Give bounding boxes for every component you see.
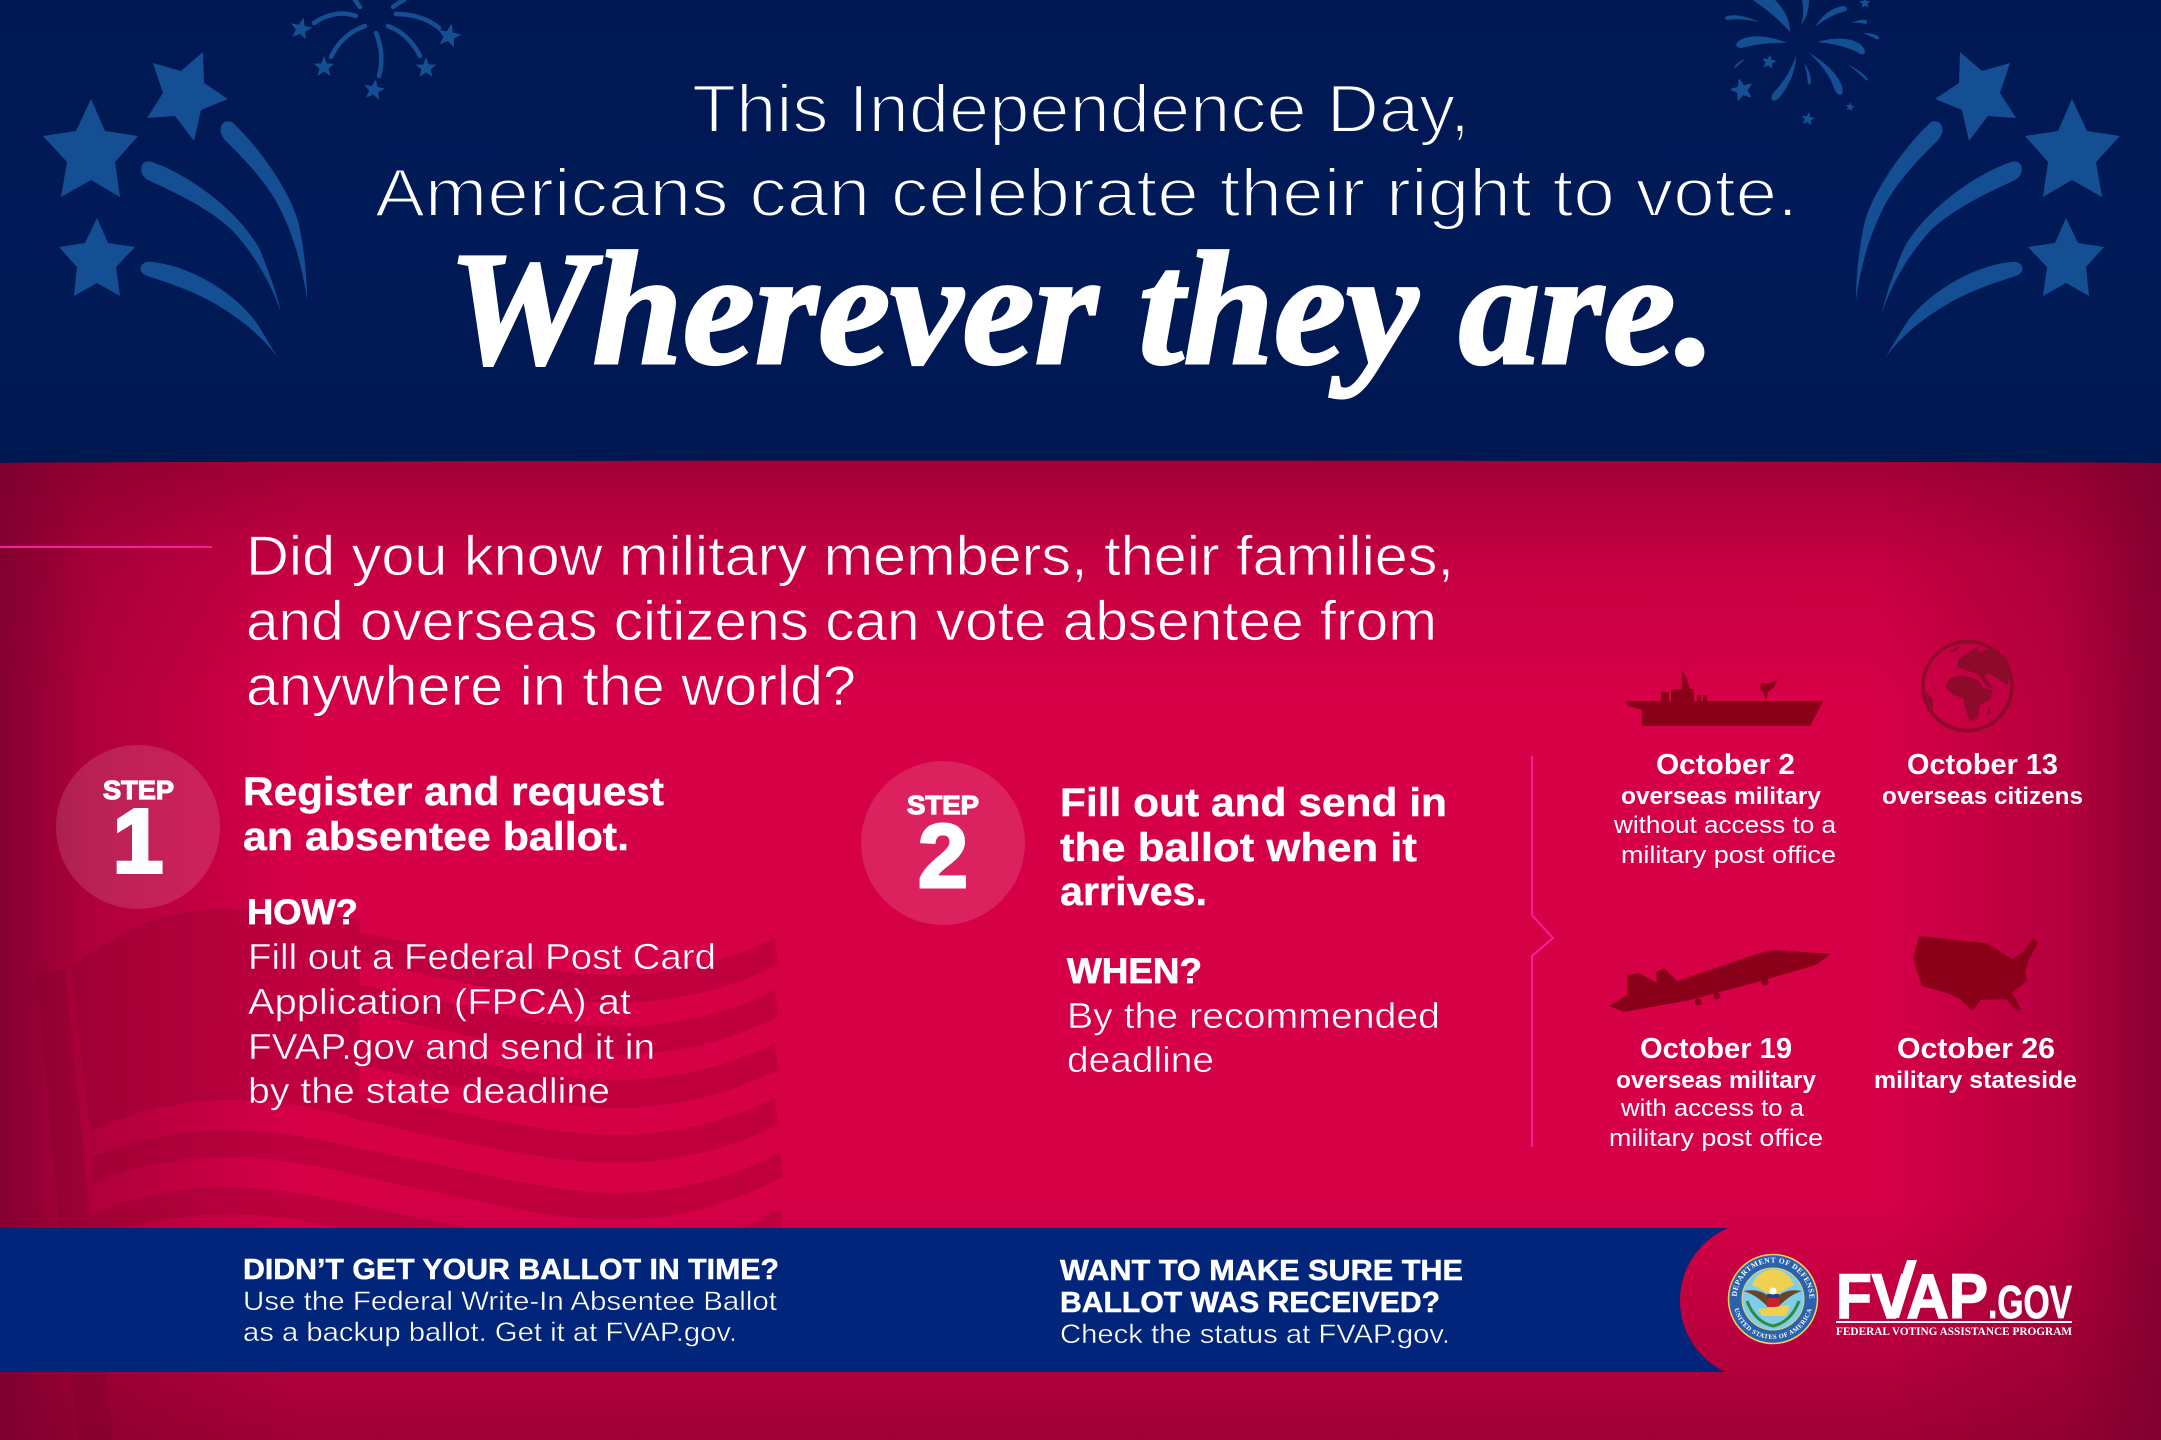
logo: FVAP.gov [1836,1260,2072,1338]
step 1 badge [56,745,220,909]
date: October 19: overseas military [1616,1067,1817,1094]
callout: ballot received [1060,1255,1463,1349]
step 2 heading: arrives. [1060,870,1207,914]
title: line one and two: This Independence Day, [692,71,1470,147]
step 2 heading [1060,781,1447,914]
intro question [246,524,1454,717]
step 1 badge: STEP [103,775,174,805]
seal: Department of Defense: DEPARTMENT OF DEFENSE [1732,1258,1814,1298]
step 1 how text: FVAP.gov and send it in [248,1026,655,1067]
date: October 19 [1609,1033,1823,1152]
background flag [37,909,783,1440]
step 2 badge: STEP [907,790,979,820]
callout: ballot received: WANT TO MAKE SURE THE [1060,1255,1463,1287]
left fireworks and stars [43,52,307,358]
step 2 when text [1067,952,1440,1080]
divider arrow [1532,756,1553,1147]
step 1 how text: by the state deadline [248,1070,610,1111]
date: October 26: military stateside [1874,1067,2077,1094]
icon: aircraft carrier [1626,670,1823,726]
step 2 when text: By the recommended [1067,995,1440,1036]
logo: FVAP.gov: .GOV [1988,1276,2072,1328]
step 1 heading [243,770,664,859]
right fireworks and stars [1856,52,2120,358]
step 2 badge: 2 [918,807,968,907]
date: October 13: October 13 [1907,749,2058,781]
step 1 how text: Fill out a Federal Post Card [248,936,716,977]
step 1 heading: an absentee ballot. [243,815,629,859]
callout: ballot received: Check the status at FVAP.gov. [1060,1319,1450,1349]
red body background [0,460,2161,1440]
date: October 2: without access to a [1613,812,1837,839]
date: October 2: October 2 [1656,749,1795,781]
small firework: top left [288,0,463,101]
step 2 when text: WHEN? [1067,952,1202,991]
date: October 19: with access to a [1620,1095,1805,1122]
callout: ballot in time: DIDN’T GET YOUR BALLOT IN TIME? [243,1254,779,1286]
icon: globe [1923,642,2012,730]
header background [0,0,2161,470]
small firework: top right [1725,0,1879,125]
step 1 how text: Application (FPCA) at [248,981,631,1022]
intro accent line [0,546,212,548]
step 1 heading: Register and request [243,770,664,814]
date: October 2: military post office [1621,842,1836,869]
date: October 13: overseas citizens [1882,783,2083,810]
icon: United States map [1913,936,2038,1011]
step 1 how text [247,893,716,1111]
intro question: anywhere in the world? [246,654,856,717]
logo: FVAP.gov: FEDERAL VOTING ASSISTANCE PROGRAM [1836,1324,2072,1338]
date: October 19: October 19 [1640,1033,1792,1065]
title: Wherever they are.: Wherever they are. [448,220,1716,399]
icon: fighter jet [1609,950,1831,1012]
callout: ballot received: BALLOT WAS RECEIVED? [1060,1287,1440,1319]
callout: ballot in time: as a backup ballot. Get it at FVAP.gov. [243,1317,737,1347]
date: October 26 [1874,1033,2077,1094]
date: October 13 [1882,749,2083,810]
date: October 2 [1613,749,1837,869]
title: line one and two: Americans can celebrate their right to vote. [375,155,1798,231]
seal: Department of Defense: UNITED STATES OF AMERICA [1734,1308,1812,1339]
seal: Department of Defense [1728,1254,1818,1344]
logo: FVAP.gov: FVAP [1836,1262,1988,1332]
intro question: and overseas citizens can vote absentee from [246,589,1437,652]
step 2 heading: the ballot when it [1060,826,1417,870]
bottom blue bar [0,1228,1728,1372]
step 2 heading: Fill out and send in [1060,781,1447,825]
intro question: Did you know military members, their families, [246,524,1454,587]
callout: ballot in time [243,1254,779,1347]
date: October 26: October 26 [1897,1033,2055,1065]
step 2 badge [861,761,1025,925]
step 1 how text: HOW? [247,893,358,932]
step 2 when text: deadline [1067,1039,1214,1080]
date: October 19: military post office [1609,1125,1823,1152]
step 1 badge: 1 [113,792,163,892]
title: line one and two [375,71,1798,231]
date: October 2: overseas military [1621,783,1822,810]
callout: ballot in time: Use the Federal Write-In Absentee Ballot [243,1286,778,1316]
